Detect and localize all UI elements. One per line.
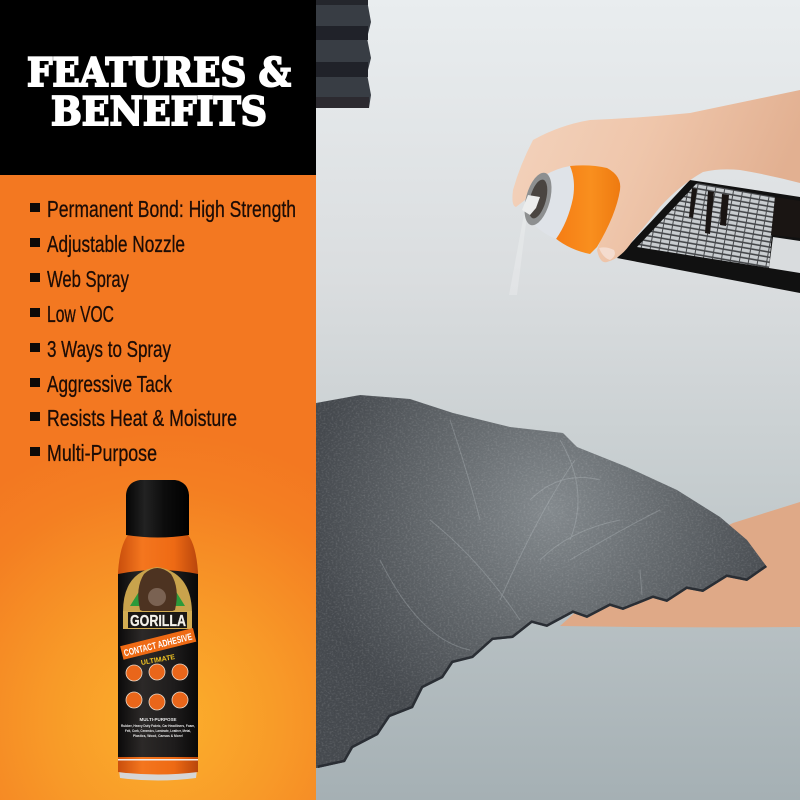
multi-purpose text: Plastics, Wood, Canvas & More! (133, 733, 183, 738)
feature 8 text: Multi-Purpose (47, 440, 157, 466)
can body (617, 180, 800, 293)
panel: photo background wall (316, 0, 800, 800)
serrated underside shadow (318, 567, 767, 768)
contact adhesive band (120, 628, 196, 660)
feature 3 text: Web Spray (47, 266, 129, 292)
feature 6 text: Aggressive Tack (47, 371, 172, 397)
bullet 3 (30, 273, 40, 282)
label white line (118, 759, 198, 760)
feature 2 text: Adjustable Nozzle (47, 231, 185, 257)
black label (118, 570, 198, 757)
bullet 6 (30, 378, 40, 387)
benefit icons (126, 664, 188, 710)
title (27, 50, 291, 135)
nozzle tip (522, 195, 540, 215)
feature 1 text: Permanent Bond: High Strength (47, 196, 296, 222)
feature 7 text: Resists Heat & Moisture (47, 405, 237, 431)
multi-purpose text: MULTI-PURPOSE (140, 717, 176, 722)
panel: black title header (0, 0, 316, 175)
logo green accents (130, 582, 185, 606)
spray can held in hand (512, 90, 800, 293)
logo arch (123, 567, 192, 612)
nozzle ring (519, 170, 557, 228)
bullet 5 (30, 343, 40, 352)
bullet 7 (30, 412, 40, 421)
feature list (30, 196, 296, 466)
can silver collar (532, 166, 574, 239)
can base rim (119, 770, 197, 780)
nozzle opening (525, 178, 551, 220)
foam sheet with adhesive dusting (316, 390, 776, 775)
can fine print label (637, 183, 775, 268)
panel: orange feature list background (0, 175, 316, 800)
spray mist (509, 214, 527, 295)
can dome orange (555, 165, 620, 254)
logo banner (123, 611, 192, 629)
gorilla head (138, 568, 177, 614)
feature 5 text: 3 Ways to Spray (47, 336, 171, 362)
bullet 8 (30, 447, 40, 456)
hand and arm (512, 90, 800, 262)
black cap (126, 480, 189, 538)
ultimate label: ULTIMATE (141, 654, 176, 667)
title: BENEFITS (51, 89, 267, 135)
can dark label bands (689, 188, 800, 238)
foam wedge panel on wall (316, 0, 371, 108)
brand plate (128, 612, 187, 628)
thumb nail (599, 247, 615, 260)
contact adhesive band: CONTACT ADHESIVE (123, 632, 193, 659)
feature 4 text: Low VOC (47, 301, 114, 327)
can orange body and shoulder (118, 535, 198, 774)
can barcode (769, 237, 800, 273)
product can: Gorilla Contact Adhesive (118, 480, 198, 780)
bullet 1 (30, 203, 40, 212)
title: FEATURES & (27, 50, 291, 96)
bullet 2 (30, 238, 40, 247)
bullet 4 (30, 308, 40, 317)
multi-purpose text: Rubber, Heavy Duty Fabric, Car Headliners, Foam, (121, 723, 195, 728)
multi-purpose text (121, 717, 195, 738)
gorilla face (148, 588, 166, 606)
adhesive streaks (380, 420, 660, 650)
multi-purpose text: Felt, Cork, Ceramics, Laminate, Leather, Metal, (125, 728, 191, 733)
lower forearm holding foam (560, 502, 800, 627)
brand text: GORILLA (130, 613, 186, 630)
